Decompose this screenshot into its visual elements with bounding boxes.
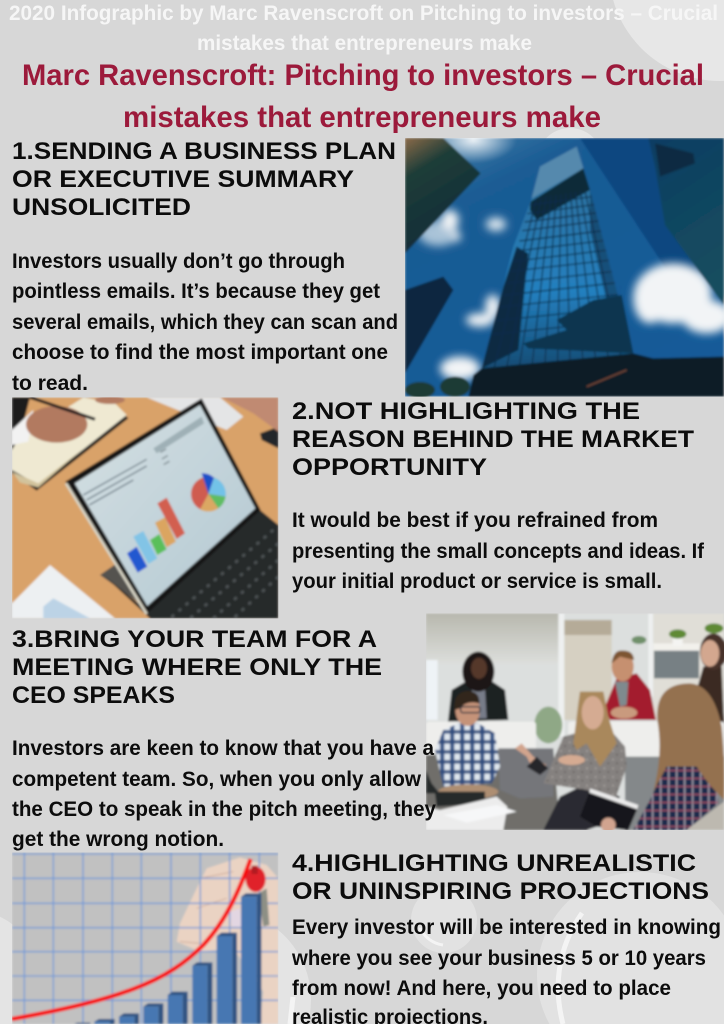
body text 3: get the wrong notion. — [12, 828, 224, 851]
top caption — [9, 2, 718, 55]
heading 4: OR UNINSPIRING PROJECTIONS — [292, 878, 709, 905]
body text 2: presenting the small concepts and ideas. If — [292, 540, 705, 563]
top caption: 2020 Infographic by Marc Ravenscroft on Pitching to investors – Crucial — [9, 2, 718, 25]
body text 3: the CEO to speak in the pitch meeting, they — [12, 798, 436, 821]
heading 1: UNSOLICITED — [12, 194, 191, 221]
photo: growth bar chart with hand — [12, 852, 278, 1024]
title: mistakes that entrepreneurs make — [123, 101, 601, 134]
heading 4: 4.HIGHLIGHTING UNREALISTIC — [292, 850, 696, 877]
heading 1 — [12, 138, 396, 221]
photo: team meeting — [426, 613, 724, 832]
body text 3: competent team. So, when you only allow — [12, 768, 422, 791]
body text 4: Every investor will be interested in knowing — [292, 916, 721, 939]
heading 3: MEETING WHERE ONLY THE — [12, 654, 382, 681]
top caption: mistakes that entrepreneurs make — [197, 32, 532, 55]
body text 2 — [292, 509, 705, 593]
heading 2: OPPORTUNITY — [292, 454, 487, 481]
body text 4 — [291, 916, 721, 1024]
panel: mistake 3 — [12, 613, 724, 851]
body text 4: where you see your business 5 or 10 years — [291, 947, 706, 970]
body text 2: It would be best if you refrained from — [292, 509, 658, 532]
heading 2: REASON BEHIND THE MARKET — [292, 426, 694, 453]
heading 3 — [12, 626, 382, 709]
title: Marc Ravenscroft: Pitching to investors – Crucial — [22, 59, 704, 92]
body text 1: several emails, which they can scan and — [12, 311, 398, 334]
body text 1: pointless emails. It’s because they get — [12, 280, 380, 303]
heading 3: CEO SPEAKS — [12, 682, 175, 709]
body text 1 — [12, 250, 398, 395]
panel: mistake 1 — [12, 117, 724, 398]
body text 4: from now! And here, you need to place — [292, 977, 671, 1000]
panel: mistake 2 — [12, 396, 705, 618]
body text 3 — [12, 737, 436, 851]
body text 1: to read. — [12, 372, 88, 395]
heading 4 — [292, 850, 709, 905]
body text 3: Investors are keen to know that you have a — [12, 737, 434, 760]
heading 2: 2.NOT HIGHLIGHTING THE — [292, 398, 640, 425]
photo: skyscrapers — [405, 117, 724, 398]
body text 2: your initial product or service is small. — [292, 570, 662, 593]
heading 1: OR EXECUTIVE SUMMARY — [12, 166, 354, 193]
heading 2 — [292, 398, 694, 481]
photo: tablet with charts — [12, 396, 278, 618]
panel: mistake 4 — [12, 850, 721, 1024]
title — [22, 59, 704, 134]
body text 1: Investors usually don’t go through — [12, 250, 345, 273]
heading 3: 3.BRING YOUR TEAM FOR A — [12, 626, 377, 653]
heading 1: 1.SENDING A BUSINESS PLAN — [12, 138, 396, 165]
body text 1: choose to find the most important one — [12, 341, 388, 364]
